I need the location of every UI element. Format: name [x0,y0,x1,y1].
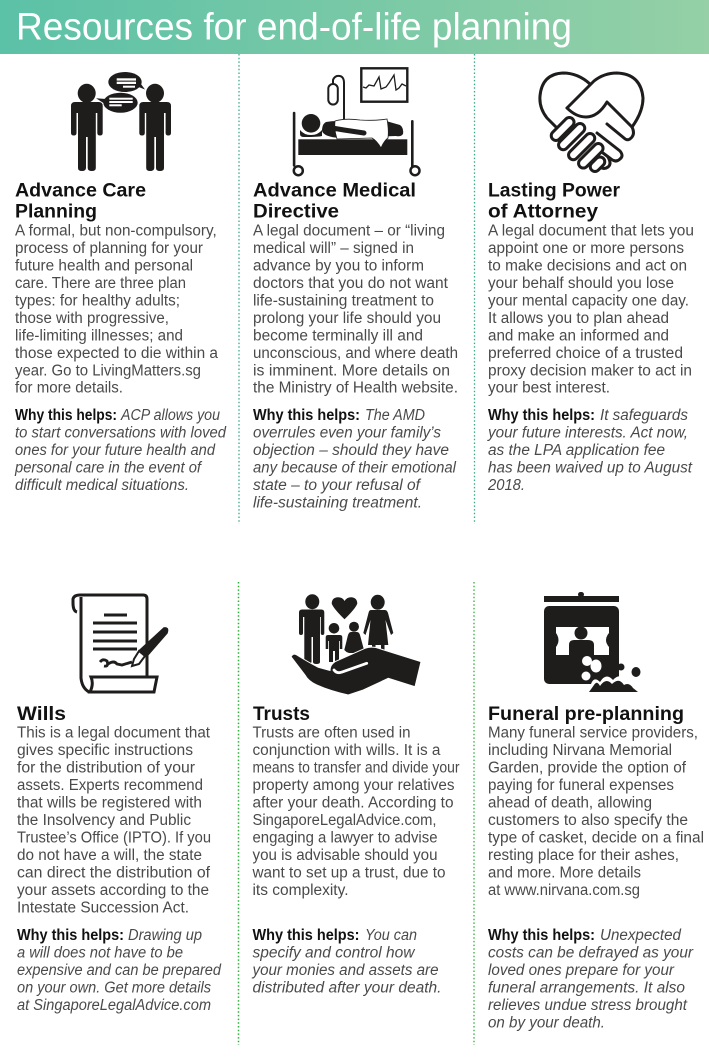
why this helps: advance care planning: Why this helps: [15,407,117,424]
body text: advance care planning: those with progressive, [15,310,169,327]
why this helps: funeral pre-planning: costs can be defrayed as your [488,944,694,962]
body text: wills [17,724,211,917]
body text: funeral pre-planning: ahead of death, allowing [488,794,652,812]
body text: wills: for the distribution of your [17,759,195,776]
body text: trusts: want to set up a trust, due to [252,865,446,882]
body text: advance care planning: those expected to die within a [15,345,218,362]
why this helps: wills: Why this helps: [17,927,124,944]
body text: lasting power of attorney: It allows you to plan ahead [488,310,669,327]
body text: lasting power of attorney: proxy decision maker to act in [488,362,692,379]
why this helps: lasting power of attorney: has been waived up to August [488,460,693,476]
why this helps: trusts: You can [365,927,417,944]
body text: funeral pre-planning: and more. More details [488,865,641,882]
why this helps: funeral pre-planning [488,927,694,1032]
body text: funeral pre-planning: Garden, provide the option of [488,759,687,776]
body text: advance care planning [15,223,218,397]
body text: advance medical directive: unconscious, and where death [253,345,458,362]
heading: wills: Wills [17,704,66,725]
body text: funeral pre-planning: paying for funeral expenses [488,777,674,794]
why this helps: wills [17,927,222,1014]
body text: advance care planning: process of planning for your [15,240,203,257]
body text: advance medical directive: life-sustaining treatment to [253,292,434,310]
body text: wills: can direct the distribution of [17,865,211,882]
why this helps: advance medical directive: any because of their emotional [253,460,457,476]
body text: advance medical directive: become terminally ill and [253,327,423,344]
body text: wills: This is a legal document that [17,724,211,741]
why this helps: funeral pre-planning: relieves undue stress brought [488,997,688,1014]
why this helps: funeral pre-planning: Why this helps: [488,927,595,944]
body text: advance care planning: year. Go to LivingMatters.sg [15,362,201,379]
body text: funeral pre-planning: resting place for their ashes, [488,847,679,864]
body text: trusts: SingaporeLegalAdvice.com, [252,812,436,829]
body text: trusts: means to transfer and divide your [252,759,460,776]
heading: advance medical directive [253,181,416,223]
body text: trusts: conjunction with wills. It is a [252,742,441,759]
body text: trusts: property among your relatives [252,777,455,794]
body text: advance care planning: for more details. [15,380,123,397]
why this helps: advance care planning: personal care in the event of [14,460,203,476]
body text: wills: assets. Experts recommend [17,777,203,794]
icon: urn with flowers [544,592,640,693]
why this helps: trusts: your monies and assets are [252,962,439,979]
body text: advance care planning: A formal, but non-compulsory, [15,223,217,240]
why this helps: trusts: specify and control how [252,944,416,962]
panel: wills [17,595,222,1014]
body text: advance care planning: types: for healthy adults; [15,292,180,310]
why this helps: advance medical directive [253,407,457,512]
body text: wills: gives specific instructions [17,742,193,759]
body text: lasting power of attorney: A legal document that lets you [488,223,694,240]
why this helps: funeral pre-planning: loved ones prepare for your [488,962,675,979]
body text: funeral pre-planning: including Nirvana Memorial [488,742,672,759]
body text: wills: the Insolvency and Public [17,812,191,829]
body text: trusts: engaging a lawyer to advise [252,830,438,846]
why this helps: lasting power of attorney: 2018. [487,477,525,494]
why this helps: advance medical directive: objection – should they have [253,442,449,459]
why this helps: trusts [252,927,442,996]
body text: trusts: after your death. According to [252,794,454,812]
icon: scroll and pen [73,595,168,692]
why this helps: advance medical directive: Why this helps: [253,407,360,424]
body text: lasting power of attorney [488,223,694,397]
why this helps: wills: Drawing up [128,927,202,944]
panel: lasting power of attorney [487,73,694,494]
why this helps: advance medical directive: The AMD [365,407,425,424]
why this helps: advance care planning: ACP allows you [120,407,220,424]
why this helps: funeral pre-planning: Unexpected [600,927,682,944]
icon: two people talking [71,72,171,171]
body text: advance care planning: care. There are three plan [15,275,186,292]
body text: lasting power of attorney: your best interest. [488,380,610,397]
body text: funeral pre-planning: type of casket, decide on a final [488,830,704,846]
body text: advance medical directive [253,223,458,397]
heading: advance medical directive: Directive [253,202,339,223]
body text: advance medical directive: is imminent. More details on [253,362,450,379]
why this helps: wills: a will does not have to be [17,944,183,962]
why this helps: lasting power of attorney: It safeguards [600,407,688,424]
body text: funeral pre-planning: Many funeral service providers, [488,724,698,741]
panel: funeral pre-planning [488,592,704,1032]
body text: wills: Intestate Succession Act. [17,900,189,917]
title banner [0,0,709,54]
body text: lasting power of attorney: preferred choice of a trusted [488,345,683,362]
body text: trusts: Trusts are often used in [252,724,410,741]
why this helps: advance care planning [14,407,227,494]
why this helps: funeral pre-planning: funeral arrangements. It also [488,980,685,996]
why this helps: wills: on your own. Get more details [17,980,211,996]
body text: wills: your assets according to the [17,882,209,899]
body text: lasting power of attorney: to make decisions and act on [488,258,687,275]
why this helps: lasting power of attorney: Why this helps: [488,407,595,424]
body text: lasting power of attorney: your mental capacity one day. [488,292,689,310]
why this helps: advance medical directive: overrules even your family’s [253,424,441,442]
why this helps: advance care planning: to start conversations with loved [15,424,227,442]
why this helps: funeral pre-planning: on by your death. [488,1014,605,1032]
body text: advance medical directive: medical will” – signed in [253,240,414,257]
title banner: Resources for end-of-life planning [16,6,572,48]
heading: lasting power of attorney: Lasting Power [488,181,621,202]
body text: trusts [252,724,460,899]
heading: funeral pre-planning: Funeral pre-planning [488,704,684,725]
body text: wills: that wills be registered with [17,794,202,812]
body text: advance medical directive: A legal document – or “living [253,223,445,240]
body text: funeral pre-planning [488,724,704,899]
why this helps: advance medical directive: life-sustaining treatment. [253,494,422,512]
heading: lasting power of attorney [488,181,621,223]
why this helps: wills: expensive and can be prepared [17,962,222,979]
heading: trusts: Trusts [253,704,310,725]
body text: lasting power of attorney: appoint one or more persons [488,240,684,257]
body text: trusts: its complexity. [252,882,348,899]
why this helps: lasting power of attorney: your future interests. Act now, [487,424,688,442]
heading: advance care planning: Advance Care [15,181,146,202]
why this helps: advance care planning: difficult medical situations. [15,477,189,494]
heading: advance medical directive: Advance Medical [253,181,416,202]
body text: advance medical directive: the Ministry of Health website. [253,380,458,397]
body text: lasting power of attorney: your behalf should you lose [488,275,674,292]
icon: family in a hand [291,594,421,695]
why this helps: lasting power of attorney: as the LPA application fee [488,442,665,459]
body text: wills: Trustee’s Office (IPTO). If you [17,830,211,846]
why this helps: advance care planning: ones for your future health and [15,442,216,459]
panel: advance care planning [14,72,227,494]
body text: advance medical directive: prolong your life should you [253,310,441,327]
why this helps: advance medical directive: state – to your refusal of [253,477,422,494]
body text: advance medical directive: doctors that you do not want [253,275,449,292]
icon: heart handshake [540,73,643,168]
body text: advance care planning: life-limiting illnesses; and [15,327,183,344]
panel: trusts [252,594,460,996]
body text: funeral pre-planning: customers to also specify the [488,812,688,829]
why this helps: wills: at SingaporeLegalAdvice.com [17,997,211,1014]
icon: patient in hospital bed [293,68,420,175]
why this helps: lasting power of attorney [487,407,693,494]
heading: advance care planning [15,181,146,223]
body text: trusts: you is advisable should you [252,847,438,864]
why this helps: trusts: distributed after your death. [252,980,442,996]
panel: advance medical directive [253,68,458,512]
body text: funeral pre-planning: at www.nirvana.com.sg [488,882,640,899]
body text: advance care planning: future health and personal [15,258,193,275]
heading: lasting power of attorney: of Attorney [488,202,598,223]
body text: advance medical directive: advance by you to inform [253,258,424,275]
why this helps: trusts: Why this helps: [252,927,360,944]
heading: advance care planning: Planning [15,202,97,223]
body text: wills: do not have a will, the state [17,847,202,864]
body text: lasting power of attorney: and make an informed and [488,327,669,344]
